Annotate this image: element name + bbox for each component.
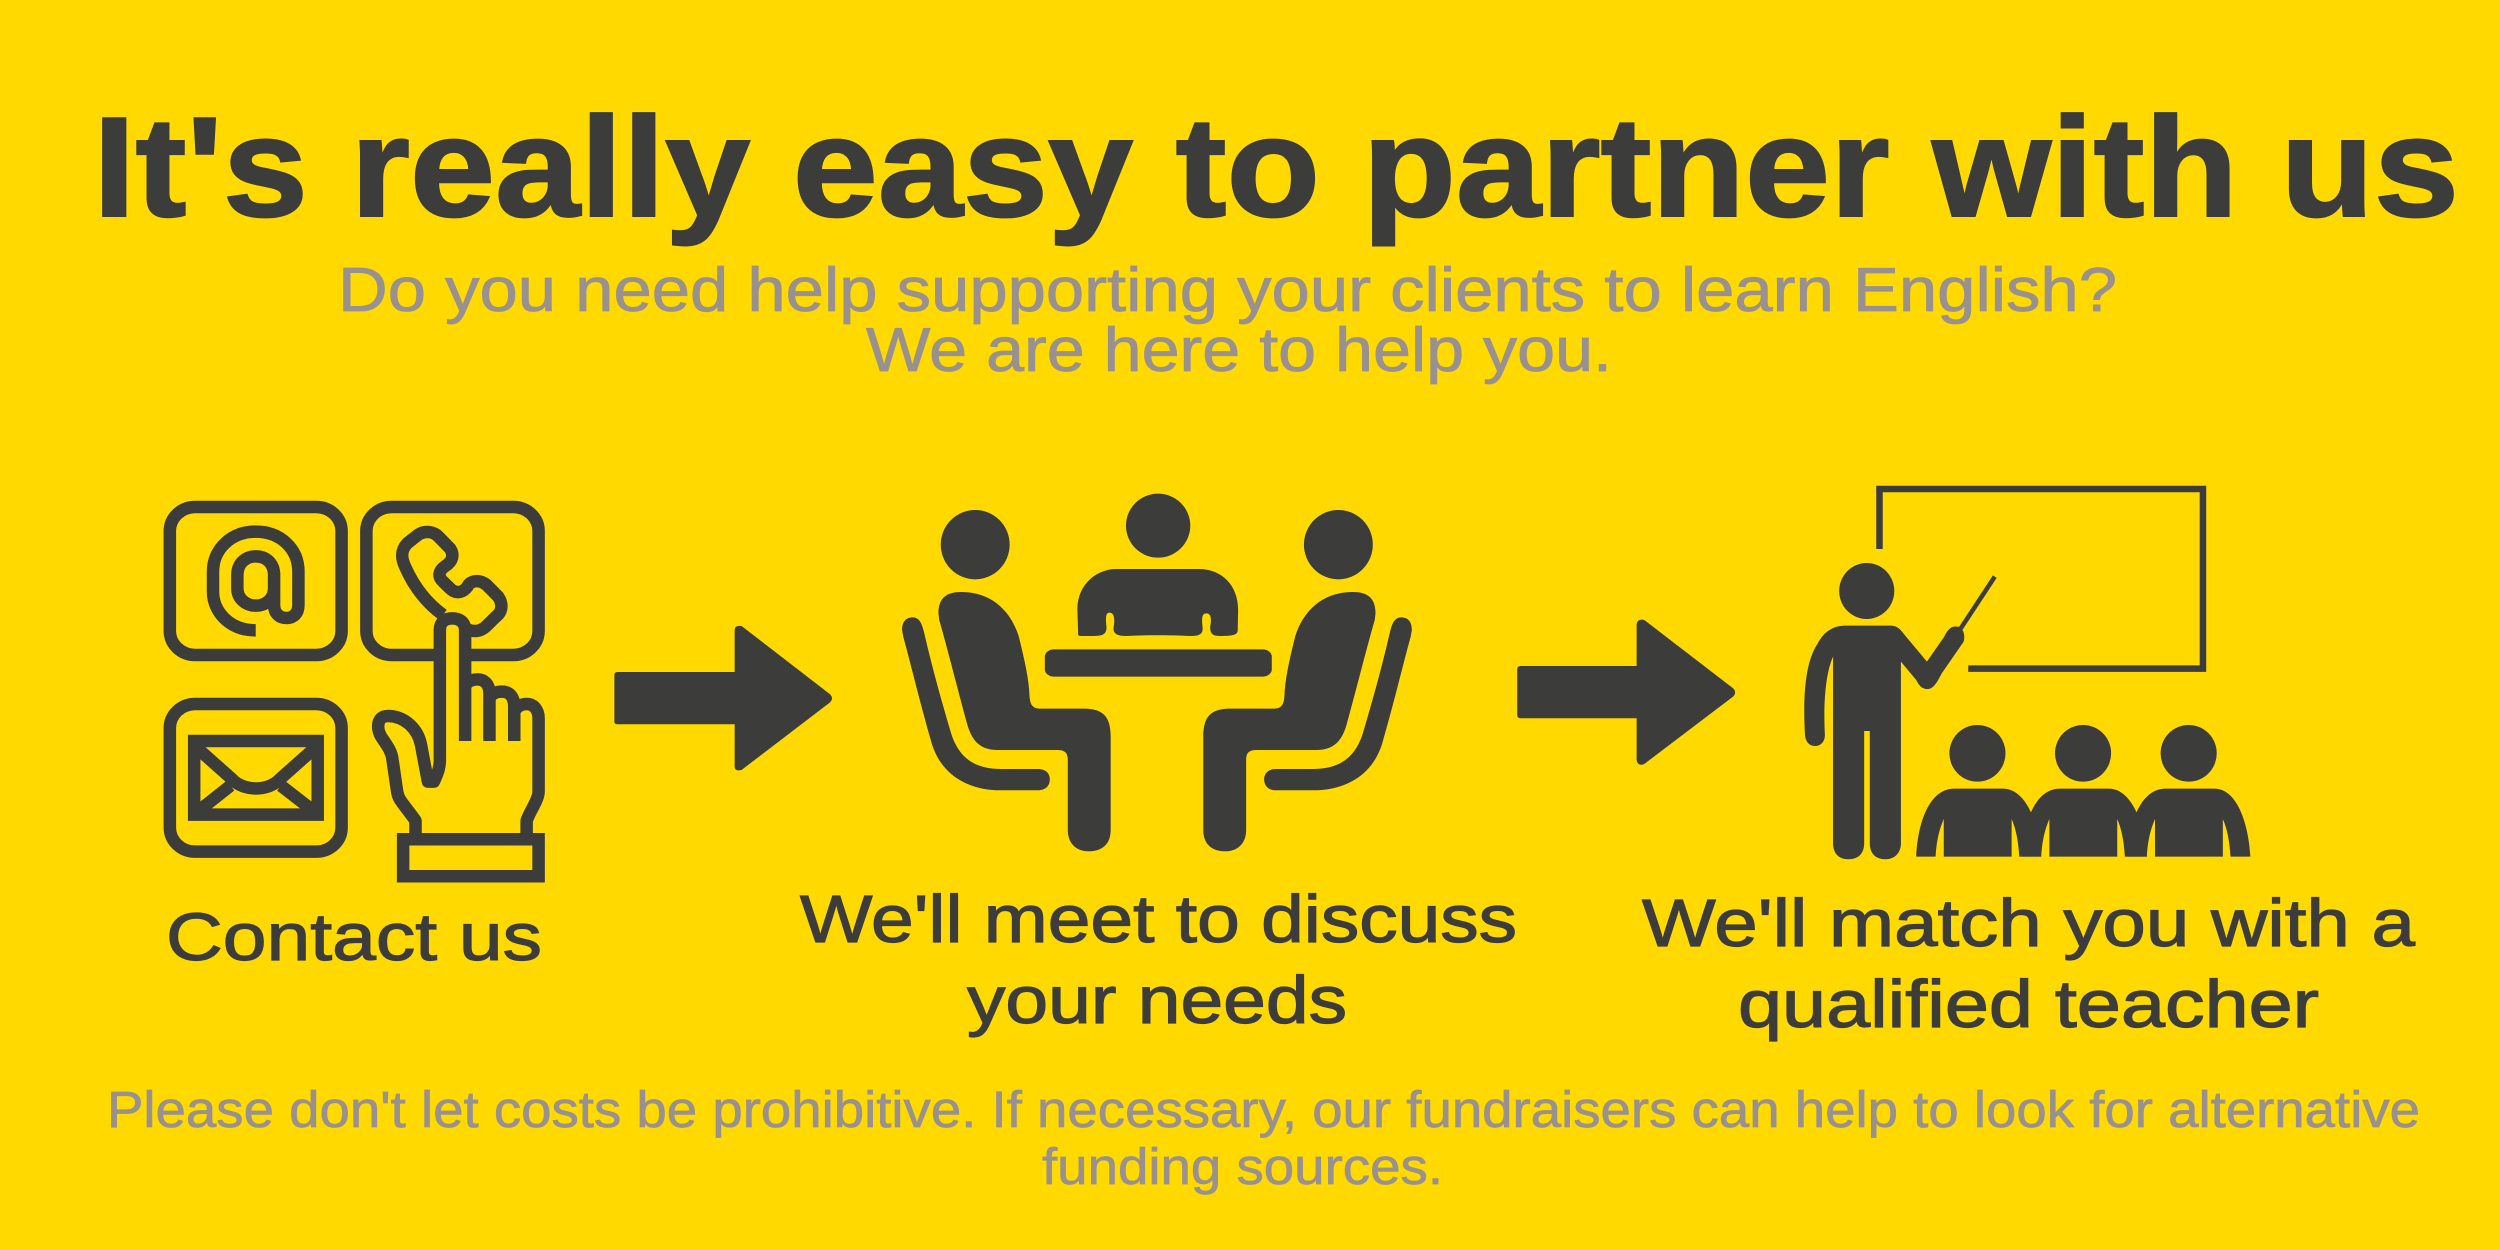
icon: envelope box [170,704,342,852]
label: meet to discuss [800,882,1517,1038]
label: meet to discuss: your needs [967,963,1347,1038]
icon: centre person and table [1045,494,1272,677]
label: match with teacher: qualified teacher [1738,967,2319,1042]
label: meet to discuss: We'll meet to discuss [800,882,1517,957]
label: match with teacher [1642,886,2416,1042]
label: match with teacher: We'll match you with a [1642,886,2416,961]
icon: three people meeting at table [902,494,1412,851]
subtitle: Do you need help supporting your clients to learn English? [338,256,2117,325]
label: contact us: Contact us [166,900,542,975]
icon: telephone box [366,507,539,655]
arrow: meeting to teacher [1517,620,1735,765]
subtitle: We are here to help you. [866,316,1612,385]
icon: pointing hand [378,618,539,876]
icon: three students [1916,725,2250,857]
icon: email at sign box [170,507,342,655]
title: It's really easy to partner with us [93,88,2459,247]
subtitle [338,256,2117,385]
footer note: Please don't let costs be prohibitive. If necessary, our fundraisers can help to look for alternative [107,1081,2420,1138]
footer note: funding sources. [1042,1138,1443,1195]
icon: presentation board [1879,489,2203,669]
footer note [107,1081,2420,1195]
icon: contact options with pointing hand [170,507,539,876]
icon: right person in chair [1203,510,1412,851]
icon: teacher with pointer [1804,563,1995,859]
icon: left person in chair [902,510,1111,851]
icon: teacher and students [1804,489,2250,859]
arrow: contact to meeting [614,626,832,770]
